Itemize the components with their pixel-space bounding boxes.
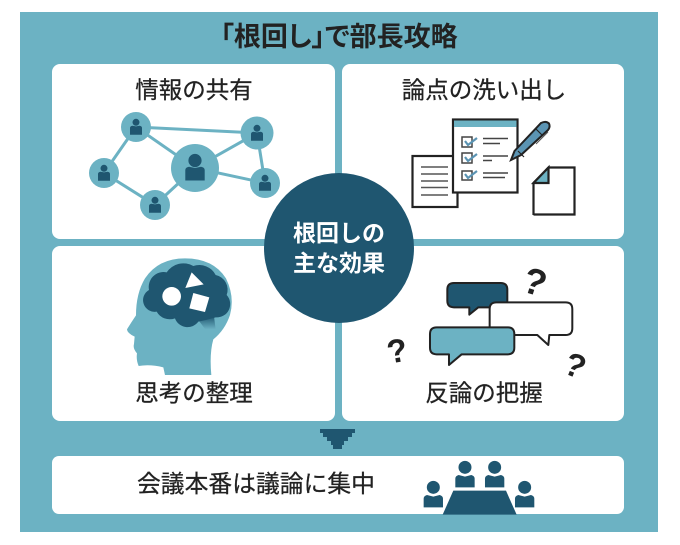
panel: organising thoughts: [52, 246, 335, 421]
icon: meeting: [424, 461, 534, 515]
heading: information sharing: 情報の共有: [135, 77, 253, 103]
panel: information sharing: [52, 64, 335, 239]
title: 「根回し」で部長攻略: [220, 22, 458, 52]
question marks: ?: [559, 344, 592, 386]
result text: 会議本番は議論に集中: [137, 471, 375, 498]
panel: grasping objections: [342, 246, 624, 421]
network diagram: [89, 112, 280, 220]
question marks: ?: [518, 259, 552, 305]
centre label: 主な効果: [293, 250, 385, 276]
centre label: 根回しの: [293, 220, 385, 246]
panel: result: [52, 456, 624, 515]
icon: speech bubbles: [430, 283, 572, 365]
heading: listing issues: 論点の洗い出し: [402, 77, 566, 103]
question marks: ?: [384, 331, 410, 371]
panel: listing issues: [342, 64, 624, 239]
icon: documents and pen: [412, 120, 574, 215]
centre circle: [264, 173, 414, 323]
heading: organising thoughts: 思考の整理: [135, 380, 253, 406]
heading: grasping objections: 反論の把握: [425, 380, 543, 406]
question marks: [384, 259, 592, 386]
icon: head with shapes: [127, 258, 232, 375]
arrow down: [320, 429, 355, 449]
